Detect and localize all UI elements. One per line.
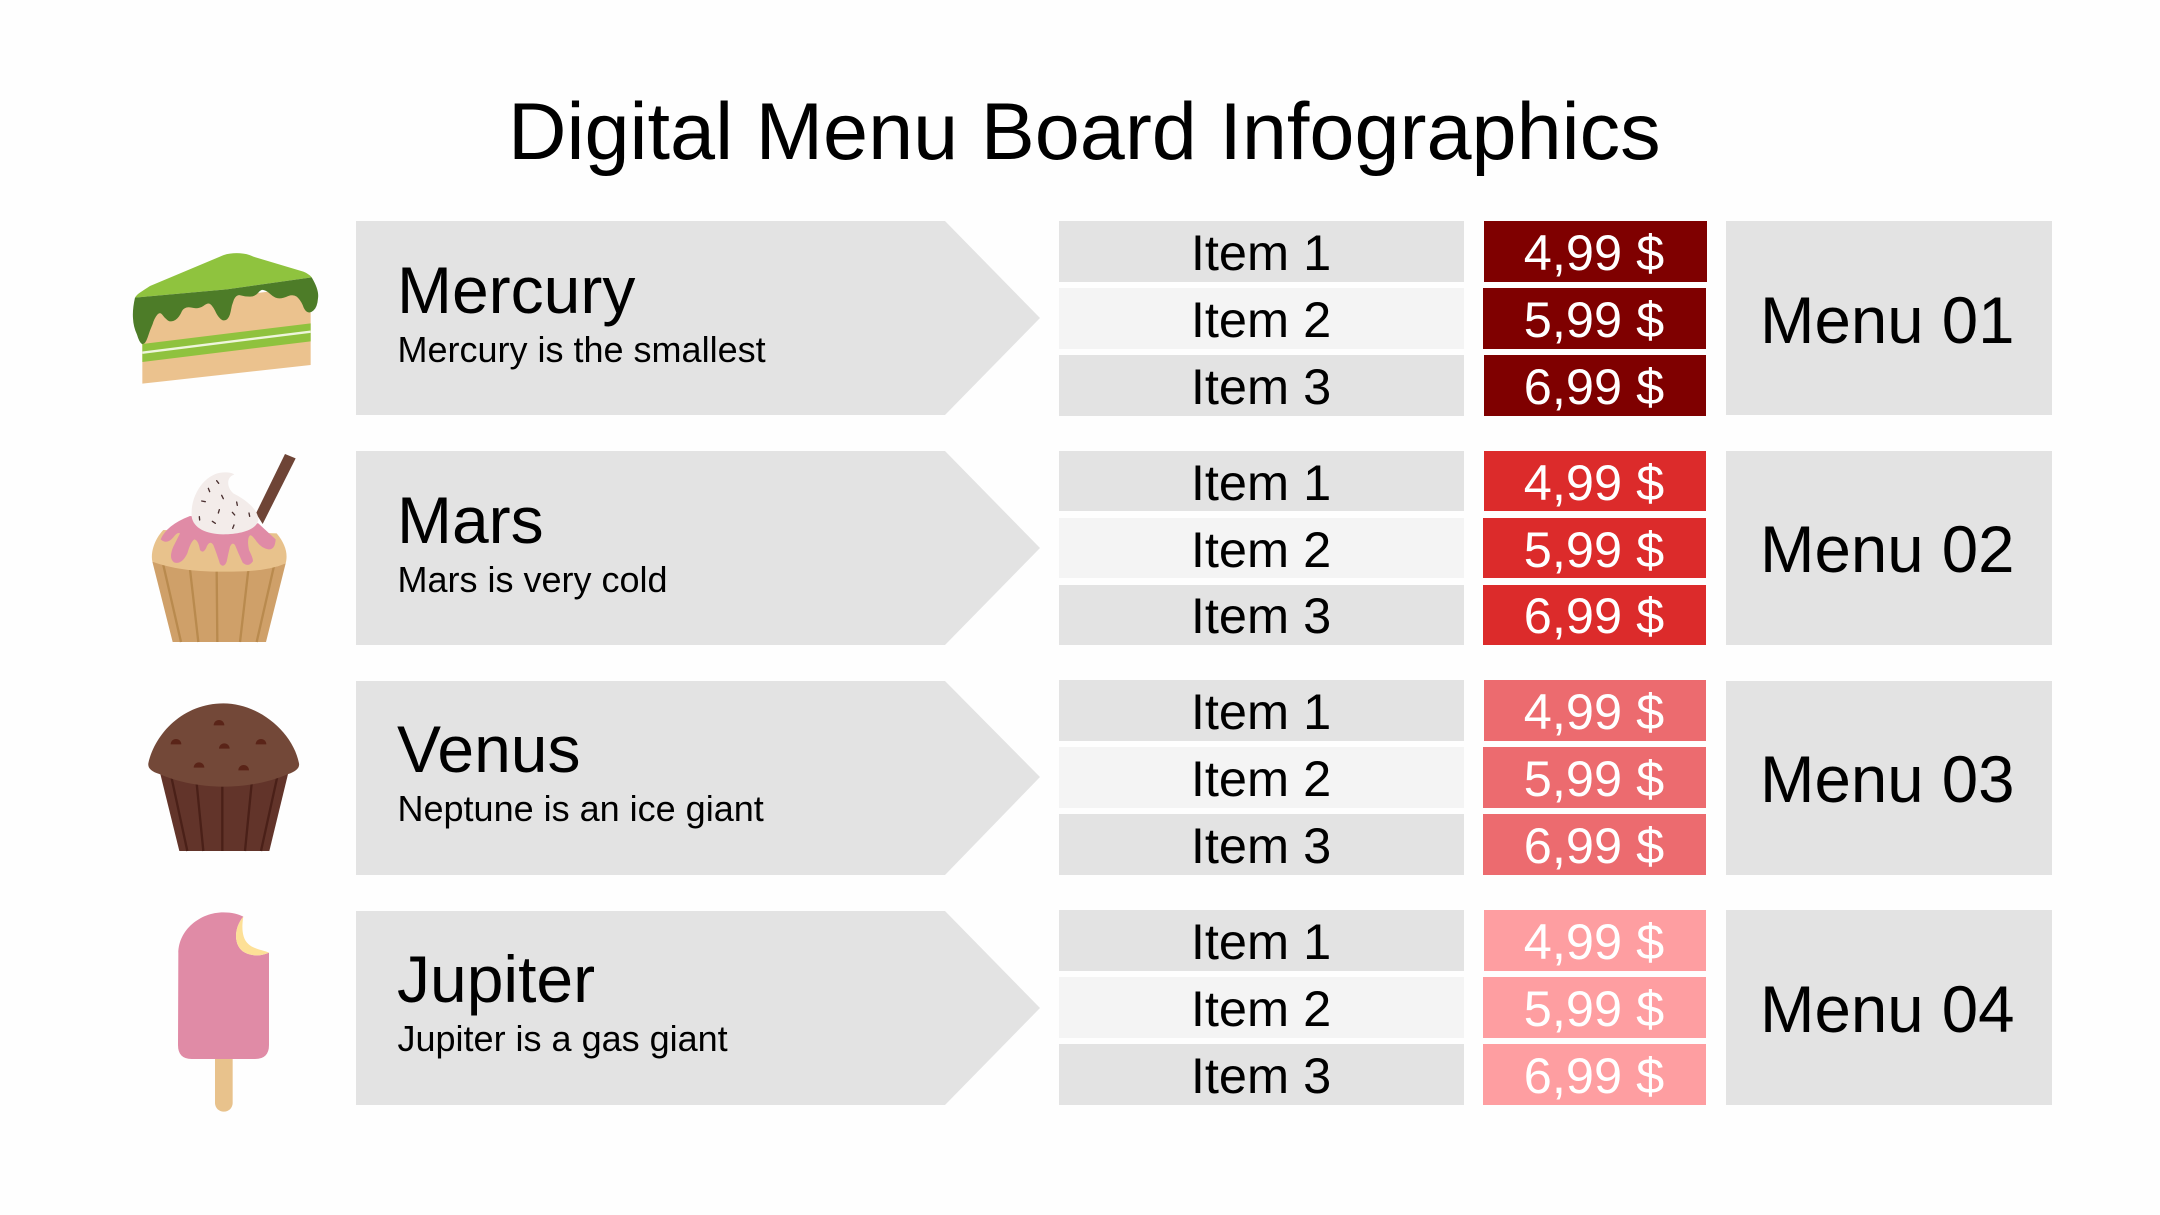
item list: Menu 02 bbox=[1059, 451, 1464, 645]
prices: Menu 03 bbox=[1483, 680, 1706, 875]
row: Mars / Menu 02 bbox=[356, 451, 2052, 645]
prices: Menu 04: 6,99 $ bbox=[1524, 1047, 1664, 1104]
prices: Menu 01: 5,99 $ bbox=[1524, 291, 1664, 348]
prices: Menu 03: 6,99 $ bbox=[1524, 817, 1664, 874]
prices: Menu 04: 5,99 $ bbox=[1524, 980, 1664, 1037]
menu label: Menu 03: Menu 03 bbox=[1760, 743, 2014, 816]
prices: Menu 03: 4,99 $ bbox=[1524, 683, 1664, 740]
arrow panel: Jupiter: Jupiter bbox=[397, 942, 595, 1016]
arrow panel: Jupiter: Jupiter is a gas giant bbox=[398, 1018, 728, 1059]
icon: chocolate muffin bbox=[148, 703, 299, 851]
icon: cupcake bbox=[152, 454, 296, 642]
item list: Menu 04 bbox=[1059, 910, 1464, 1105]
item list: Menu 03: Item 3 bbox=[1191, 817, 1331, 874]
menu label: Menu 02: Menu 02 bbox=[1760, 513, 2014, 586]
arrow panel: Venus bbox=[356, 681, 1040, 875]
item list: Menu 02: Item 1 bbox=[1191, 454, 1331, 511]
item list: Menu 01: Item 2 bbox=[1191, 291, 1331, 348]
prices: Menu 01 bbox=[1483, 221, 1707, 416]
item list: Menu 03: Item 2 bbox=[1191, 750, 1331, 807]
arrow panel: Mars: Mars is very cold bbox=[398, 559, 668, 600]
arrow panel: Mercury: Mercury bbox=[397, 253, 635, 327]
menu label: Menu 02 bbox=[1726, 451, 2052, 645]
row: Mercury / Menu 01 bbox=[356, 221, 2052, 416]
icon: cake slice bbox=[133, 253, 318, 384]
item list: Menu 01: Item 3 bbox=[1191, 358, 1331, 415]
arrow panel: Venus: Neptune is an ice giant bbox=[398, 788, 764, 829]
menu label: Menu 01 bbox=[1726, 221, 2052, 415]
item list: Menu 01: Item 1 bbox=[1191, 224, 1331, 281]
prices: Menu 01: 4,99 $ bbox=[1524, 224, 1664, 281]
item list: Menu 01 bbox=[1059, 221, 1464, 416]
prices: Menu 01: 6,99 $ bbox=[1524, 358, 1664, 415]
menu label: Menu 04 bbox=[1726, 910, 2052, 1105]
prices: Menu 04 bbox=[1483, 910, 1706, 1105]
prices: Menu 04: 4,99 $ bbox=[1524, 913, 1664, 970]
prices: Menu 02: 4,99 $ bbox=[1524, 454, 1664, 511]
menu label: Menu 01: Menu 01 bbox=[1760, 284, 2014, 357]
arrow panel: Mercury: Mercury is the smallest bbox=[398, 329, 766, 370]
title: Digital Menu Board Infographics bbox=[508, 87, 1661, 177]
prices: Menu 02 bbox=[1483, 451, 1706, 645]
prices: Menu 02: 6,99 $ bbox=[1524, 587, 1664, 644]
prices: Menu 02: 5,99 $ bbox=[1524, 521, 1664, 578]
arrow panel: Mercury bbox=[356, 221, 1040, 415]
menu label: Menu 03 bbox=[1726, 681, 2052, 875]
item list: Menu 03 bbox=[1059, 680, 1464, 875]
arrow panel: Venus: Venus bbox=[397, 712, 580, 786]
item list: Menu 02: Item 3 bbox=[1191, 587, 1331, 644]
prices: Menu 03: 5,99 $ bbox=[1524, 750, 1664, 807]
item list: Menu 04: Item 3 bbox=[1191, 1047, 1331, 1104]
item list: Menu 04: Item 1 bbox=[1191, 913, 1331, 970]
item list: Menu 03: Item 1 bbox=[1191, 683, 1331, 740]
icon: popsicle bbox=[178, 912, 269, 1112]
arrow panel: Mars: Mars bbox=[397, 483, 544, 557]
arrow panel: Mars bbox=[356, 451, 1040, 645]
row: Jupiter / Menu 04 bbox=[356, 910, 2052, 1105]
row: Venus / Menu 03 bbox=[356, 680, 2052, 875]
item list: Menu 04: Item 2 bbox=[1191, 980, 1331, 1037]
item list: Menu 02: Item 2 bbox=[1191, 521, 1331, 578]
menu label: Menu 04: Menu 04 bbox=[1760, 973, 2014, 1046]
arrow panel: Jupiter bbox=[356, 911, 1040, 1105]
